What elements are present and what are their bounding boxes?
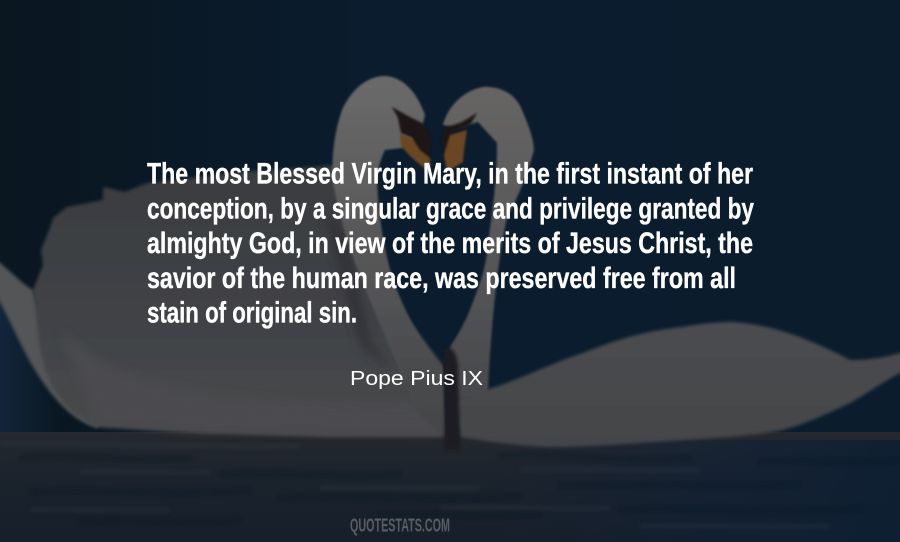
left swan wing and body bbox=[33, 165, 445, 437]
right swan body bbox=[452, 322, 900, 447]
water surface with ripples bbox=[0, 300, 900, 542]
quote text bbox=[147, 158, 754, 330]
quote text: stain of original sin. bbox=[147, 296, 357, 330]
left swan neck and head bbox=[332, 76, 445, 437]
dark water shadow between swans bbox=[444, 348, 460, 450]
shadow between wing and neck bbox=[325, 215, 395, 375]
author attribution: Pope Pius IX bbox=[350, 367, 483, 390]
watermark: QUOTESTATS.COM bbox=[350, 516, 450, 536]
left swan bbox=[0, 76, 445, 437]
left swan face and beak bbox=[392, 107, 431, 172]
right swan face and beak bbox=[441, 113, 477, 172]
right swan neck and head bbox=[443, 87, 534, 400]
left swan tail bbox=[0, 258, 105, 428]
right swan bbox=[441, 87, 900, 450]
quote text: savior of the human race, was preserved free from all bbox=[147, 262, 736, 295]
left swan lower flank highlight bbox=[60, 330, 440, 432]
